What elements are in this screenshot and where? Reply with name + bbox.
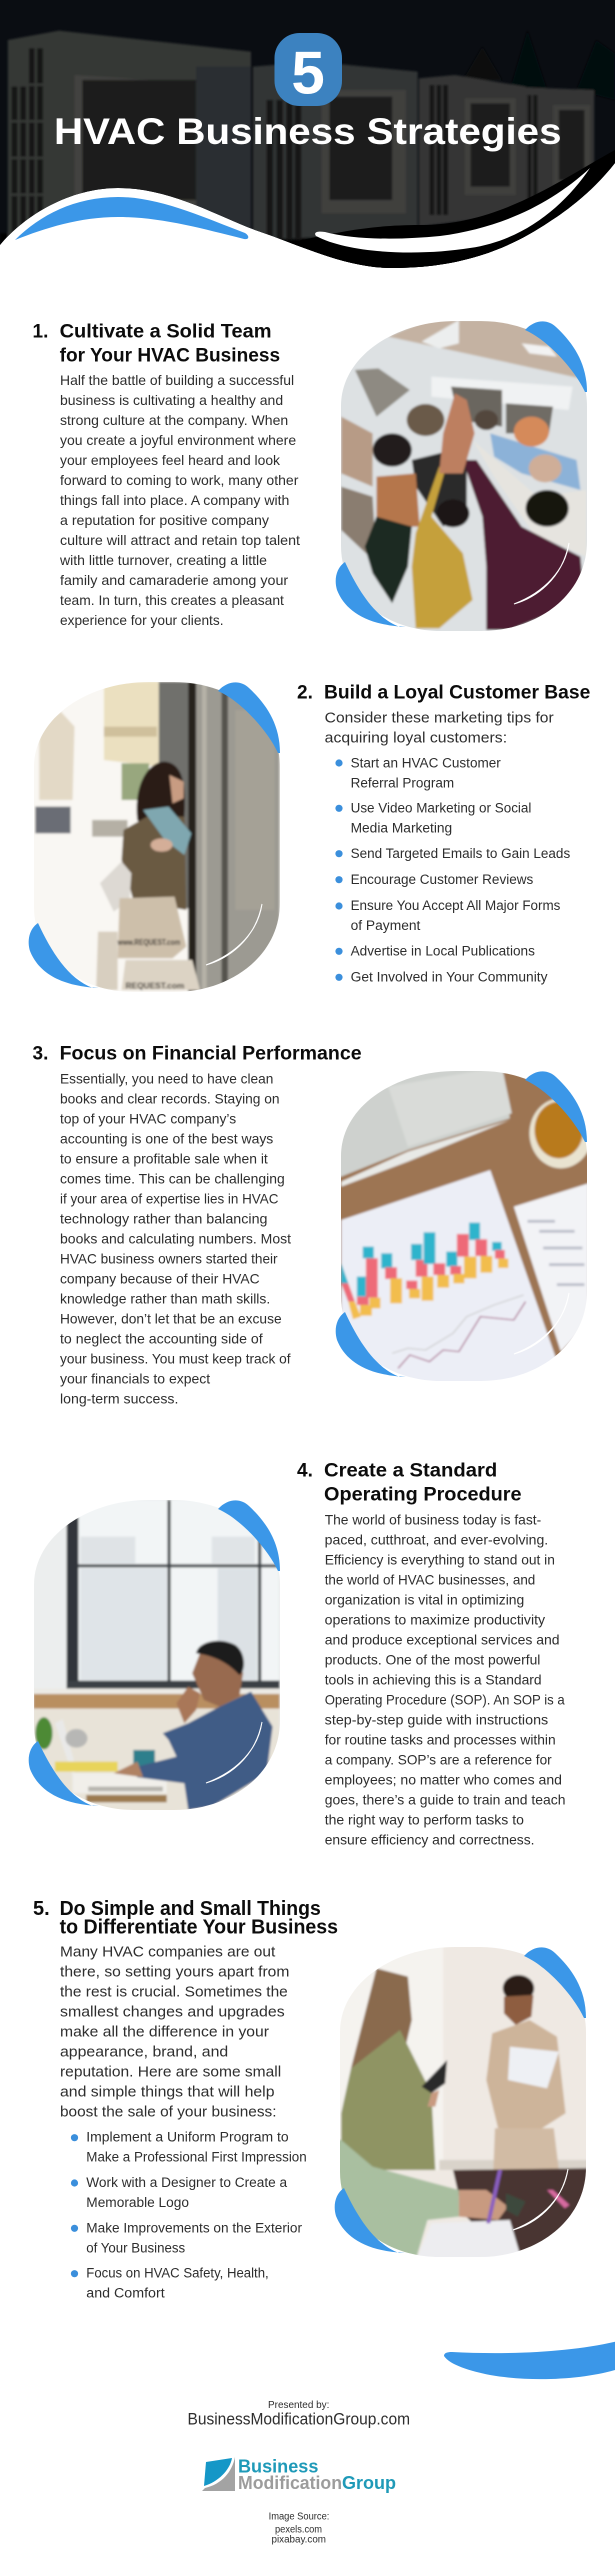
decor: blue crescent top — [525, 1071, 587, 1142]
bullet list: simple things: Make Improvements on the Exterior — [86, 2220, 303, 2235]
decor: blue crescent bottom — [335, 2188, 405, 2253]
body text: a company. SOP’s are a reference for — [325, 1752, 552, 1768]
decor: white crescent — [514, 1293, 569, 1354]
heading: Focus on Financial Performance — [60, 1043, 362, 1064]
title: HVAC Business Strategies — [54, 111, 562, 152]
photo: woman with shopping bags: REQUEST.com — [126, 981, 185, 990]
bullet list: marketing tips: Start an HVAC Customer — [351, 755, 501, 770]
body text: goes, there’s a guide to train and teach — [325, 1792, 566, 1808]
bullet list: marketing tips: Media Marketing — [351, 821, 452, 836]
logo: Group — [342, 2473, 396, 2493]
body text: Essentially, you need to have clean — [60, 1070, 273, 1086]
body text: HVAC business owners started their — [60, 1250, 278, 1266]
intro text: acquiring loyal customers: — [325, 730, 507, 746]
body text: the rest is crucial. Sometimes the — [60, 1985, 288, 2001]
body text: comes time. This can be challenging — [60, 1170, 285, 1186]
heading: Operating Procedure — [324, 1485, 522, 1506]
body text: make all the difference in your — [60, 2025, 269, 2041]
heading: Cultivate a Solid Team — [60, 321, 272, 342]
body text: there, so setting yours apart from — [60, 1965, 289, 1981]
section 4: create a standard operating procedure — [29, 1461, 566, 1848]
body text: tools in achieving this is a Standard — [325, 1672, 542, 1688]
heading: Do Simple and Small Things — [60, 1898, 321, 1920]
photo: team high five — [336, 317, 592, 633]
bullet list: simple things: Work with a Designer to Create a — [86, 2175, 288, 2190]
intro text — [325, 710, 554, 746]
body text: paced, cutthroat, and ever-evolving. — [325, 1532, 548, 1548]
image source: pixabay.com — [272, 2534, 326, 2545]
heading: 2. — [297, 682, 313, 703]
body text — [60, 1070, 291, 1406]
body text: appearance, brand, and — [60, 2045, 228, 2061]
bullet list: marketing tips: Ensure You Accept All Major Forms — [351, 898, 561, 913]
heading — [297, 1461, 522, 1506]
decor: blue crescent top — [524, 1947, 586, 2018]
white swoosh — [315, 168, 590, 252]
image source: pexels.com — [275, 2524, 322, 2535]
bullet list: marketing tips — [335, 755, 570, 984]
bullet list: marketing tips: of Payment — [351, 918, 421, 933]
bullet list: marketing tips: Advertise in Local Publications — [351, 943, 535, 958]
body text — [325, 1512, 566, 1848]
body text: knowledge rather than math skills. — [60, 1290, 270, 1306]
body text: books and calculating numbers. Most — [60, 1230, 291, 1246]
body text: Half the battle of building a successful — [60, 372, 294, 388]
body text: the right way to perform tasks to — [325, 1812, 524, 1828]
bullet list: simple things: Implement a Uniform Program to — [86, 2130, 289, 2145]
body text: to ensure a profitable sale when it — [60, 1150, 268, 1166]
body text: company because of their HVAC — [60, 1270, 260, 1286]
heading: 3. — [32, 1043, 48, 1064]
body text: the world of HVAC businesses, and — [325, 1572, 535, 1588]
website: BusinessModificationGroup.com — [188, 2410, 410, 2428]
heading — [33, 1898, 338, 1938]
image source: Image Source: — [269, 2511, 329, 2522]
bullet list: simple things: Make a Professional First Impression — [86, 2150, 307, 2165]
logo: Modification — [238, 2473, 342, 2493]
bullet list: simple things: and Comfort — [86, 2286, 165, 2301]
decor: blue crescent bottom — [29, 1741, 99, 1806]
footer — [188, 2342, 615, 2545]
body text: Many HVAC companies are out — [60, 1945, 275, 1961]
photo: woman with shopping bags — [29, 680, 282, 993]
logo: Business — [238, 2456, 318, 2476]
body text: and produce exceptional services and — [325, 1632, 560, 1648]
body text: a reputation for positive company — [60, 512, 269, 528]
logo — [202, 2456, 396, 2493]
heading: Build a Loyal Customer Base — [324, 682, 590, 703]
decor: white crescent — [514, 543, 569, 604]
bullet list: simple things: Focus on HVAC Safety, Health, — [86, 2266, 269, 2281]
decor: white crescent — [206, 1722, 262, 1783]
decor: blue crescent bottom — [336, 562, 406, 627]
bullet list: simple things: of Your Business — [86, 2240, 185, 2255]
section 2: build a loyal customer base — [29, 680, 590, 993]
body text: reputation. Here are some small — [60, 2065, 281, 2081]
heading: for Your HVAC Business — [60, 346, 280, 367]
heading: to Differentiate Your Business — [60, 1916, 338, 1938]
photo: outdoor HVAC units at dusk — [0, 0, 615, 268]
heading — [32, 321, 280, 367]
bullet list: marketing tips: Use Video Marketing or Social — [351, 801, 531, 816]
body text: to neglect the accounting side of — [60, 1330, 263, 1346]
section 1: cultivate a solid team — [32, 317, 592, 633]
heading: 4. — [297, 1461, 313, 1482]
bullet list: marketing tips: Send Targeted Emails to Gain Leads — [351, 846, 570, 861]
decor: blue crescent top — [218, 1500, 280, 1571]
body text: your financials to expect — [60, 1370, 210, 1386]
body text: Efficiency is everything to stand out in — [325, 1552, 555, 1568]
blue swoosh — [15, 197, 248, 240]
intro text: Consider these marketing tips for — [325, 710, 554, 726]
body text: operations to maximize productivity — [325, 1612, 545, 1628]
body text: employees; no matter who comes and — [325, 1772, 562, 1788]
body text: you create a joyful environment where — [60, 432, 296, 448]
body text: boost the sale of your business: — [60, 2105, 276, 2121]
body text: The world of business today is fast- — [325, 1512, 542, 1528]
decor: blue crescent top — [218, 682, 280, 753]
body text: forward to coming to work, many other — [60, 472, 299, 488]
decor: blue crescent top — [525, 321, 587, 392]
body text: technology rather than balancing — [60, 1210, 268, 1226]
blue swoosh — [444, 2342, 615, 2379]
number badge — [274, 33, 342, 106]
body text: smallest changes and upgrades — [60, 2005, 285, 2021]
body text — [59, 372, 300, 628]
heading: 1. — [32, 321, 48, 342]
body text: business is cultivating a healthy and — [60, 392, 283, 408]
body text: organization is vital in optimizing — [325, 1592, 524, 1608]
section 5: do simple and small things — [33, 1898, 592, 2301]
image source — [269, 2511, 329, 2545]
body text: step-by-step guide with instructions — [325, 1712, 548, 1728]
body text: your business. You must keep track of — [60, 1350, 291, 1366]
bullet list: marketing tips: Encourage Customer Reviews — [351, 872, 534, 887]
body text: books and clear records. Staying on — [60, 1090, 280, 1106]
body text: accounting is one of the best ways — [60, 1130, 273, 1146]
body text: culture will attract and retain top talent — [60, 532, 300, 548]
number badge: 5 — [291, 40, 325, 106]
decor: white crescent — [513, 2169, 568, 2230]
body text — [60, 1945, 289, 2121]
bullet list: simple things: Memorable Logo — [86, 2195, 189, 2210]
decor: blue crescent bottom — [336, 1312, 406, 1377]
decor: blue crescent bottom — [29, 923, 99, 988]
bullet list: simple things — [71, 2130, 307, 2301]
body text: top of your HVAC company’s — [60, 1110, 236, 1126]
section 3: focus on financial performance — [32, 1043, 592, 1406]
body text: strong culture at the company. When — [60, 412, 288, 428]
decor: white crescent — [206, 904, 262, 965]
body text: Operating Procedure (SOP). An SOP is a — [325, 1692, 565, 1708]
body text: your employees feel heard and look — [60, 452, 281, 468]
body text: with little turnover, creating a little — [59, 552, 267, 568]
body text: things fall into place. A company with — [60, 492, 289, 508]
body text: However, don’t let that be an excuse — [60, 1310, 282, 1326]
heading: Create a Standard — [324, 1461, 497, 1482]
header banner — [0, 0, 615, 268]
presented by: Presented by: — [268, 2399, 329, 2411]
photo: financial charts on desk — [336, 1067, 592, 1383]
photo: woman with shopping bags: www.REQUEST.com — [117, 938, 181, 947]
body text: and simple things that will help — [60, 2085, 274, 2101]
photo: two women presenting — [335, 1943, 592, 2260]
heading: 5. — [33, 1898, 50, 1920]
bullet list: marketing tips: Get Involved in Your Community — [351, 969, 548, 984]
body text: if your area of expertise lies in HVAC — [60, 1190, 278, 1206]
body text: experience for your clients. — [60, 612, 224, 628]
body text: products. One of the most powerful — [325, 1652, 540, 1668]
photo: man at laptop — [29, 1497, 282, 1813]
body text: for routine tasks and processes within — [325, 1732, 556, 1748]
body text: family and camaraderie among your — [60, 572, 289, 588]
body text: team. In turn, this creates a pleasant — [60, 592, 284, 608]
body text: long-term success. — [60, 1390, 178, 1406]
body text: ensure efficiency and correctness. — [325, 1832, 534, 1848]
bullet list: marketing tips: Referral Program — [351, 775, 454, 790]
